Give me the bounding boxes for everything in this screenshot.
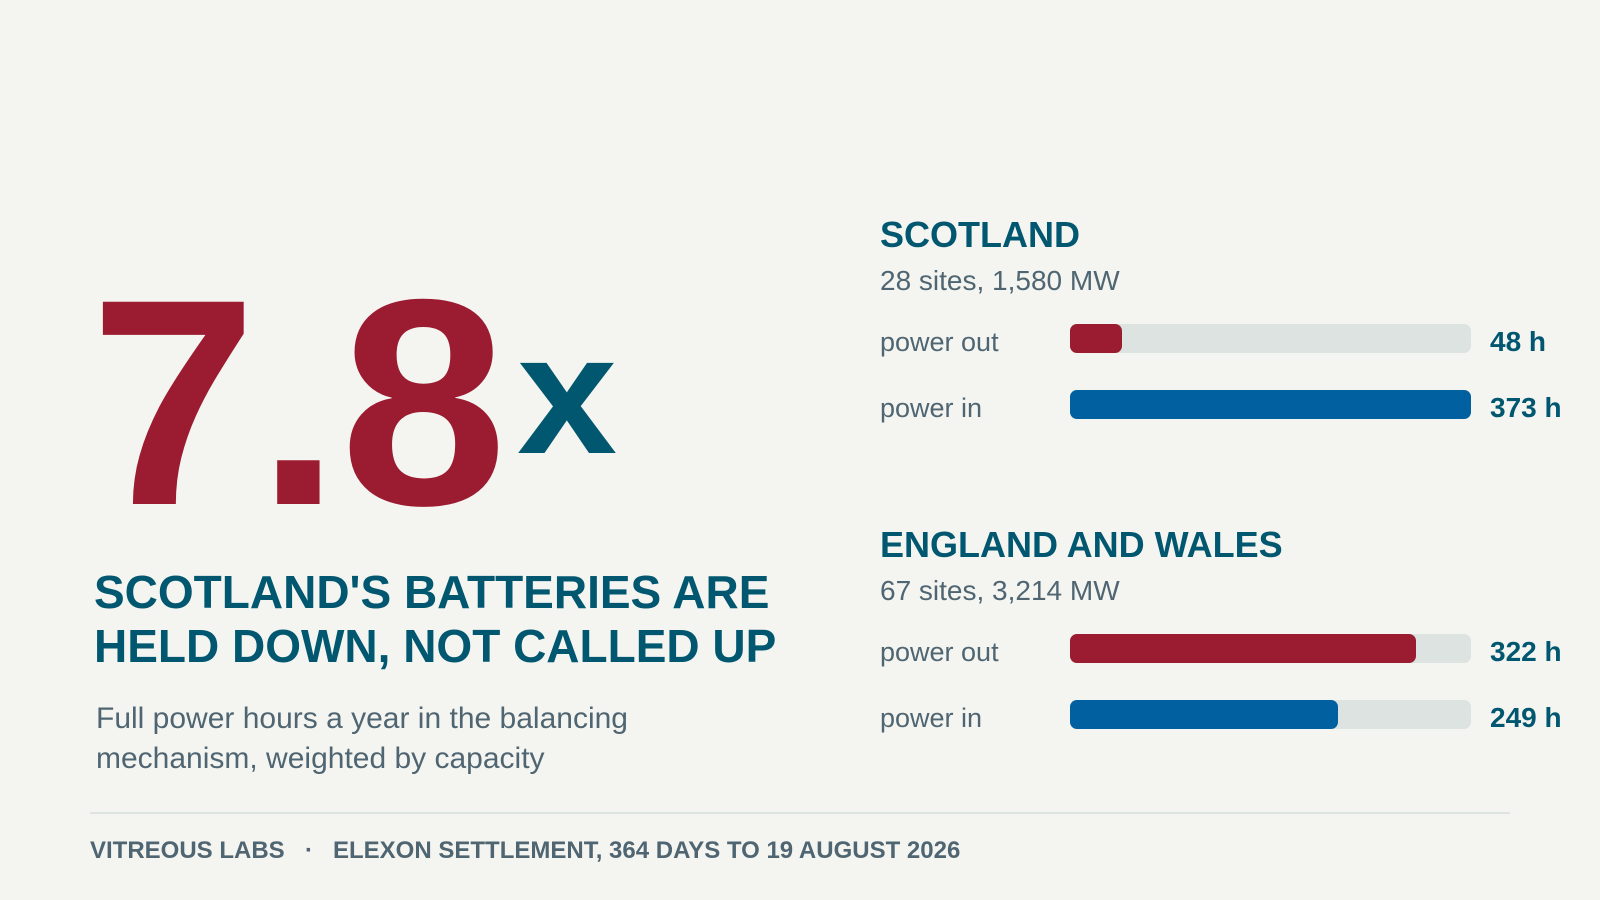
England and Wales site count: 67 sites, 3,214 MW — [880, 575, 1120, 606]
subtitle: Full power hours a year in the balancing — [96, 702, 628, 735]
panel: England and Wales — [880, 524, 1562, 733]
Scotland power in row: 373 h — [880, 390, 1562, 423]
footer source line: · — [305, 837, 313, 864]
footer source line: ELEXON SETTLEMENT, 364 DAYS TO 19 AUGUST 2026 — [333, 837, 960, 864]
Scotland power in row: 373 h: power in — [880, 393, 982, 423]
Scotland site count: 28 sites, 1,580 MW — [880, 265, 1120, 296]
subtitle — [96, 702, 628, 775]
headline: SCOTLAND'S BATTERIES ARE — [94, 566, 769, 618]
England and Wales power out row: 322 h — [880, 634, 1562, 667]
Scotland power out row: 48 h: power out — [880, 327, 999, 357]
footer source line: VITREOUS LABS — [90, 837, 285, 864]
headline: HELD DOWN, NOT CALLED UP — [94, 620, 776, 672]
England and Wales power in row: 249 h — [880, 700, 1562, 733]
big number 7.8: 7.8 — [90, 238, 507, 566]
England and Wales power out row: 322 h: power out — [880, 637, 999, 667]
England and Wales power out row: 322 h: 322 h — [1490, 636, 1562, 667]
multiplier suffix x: x — [517, 299, 617, 490]
panel: Scotland — [880, 214, 1562, 423]
Scotland power out row: 48 h: 48 h — [1490, 326, 1546, 357]
Scotland heading: SCOTLAND — [880, 214, 1080, 255]
subtitle: mechanism, weighted by capacity — [96, 742, 545, 775]
Scotland power out row: 48 h — [880, 324, 1546, 357]
Scotland power in row: 373 h: 373 h — [1490, 392, 1562, 423]
England and Wales heading: ENGLAND AND WALES — [880, 524, 1283, 565]
England and Wales power in row: 249 h: power in — [880, 703, 982, 733]
headline — [94, 566, 776, 672]
England and Wales power in row: 249 h: 249 h — [1490, 702, 1562, 733]
